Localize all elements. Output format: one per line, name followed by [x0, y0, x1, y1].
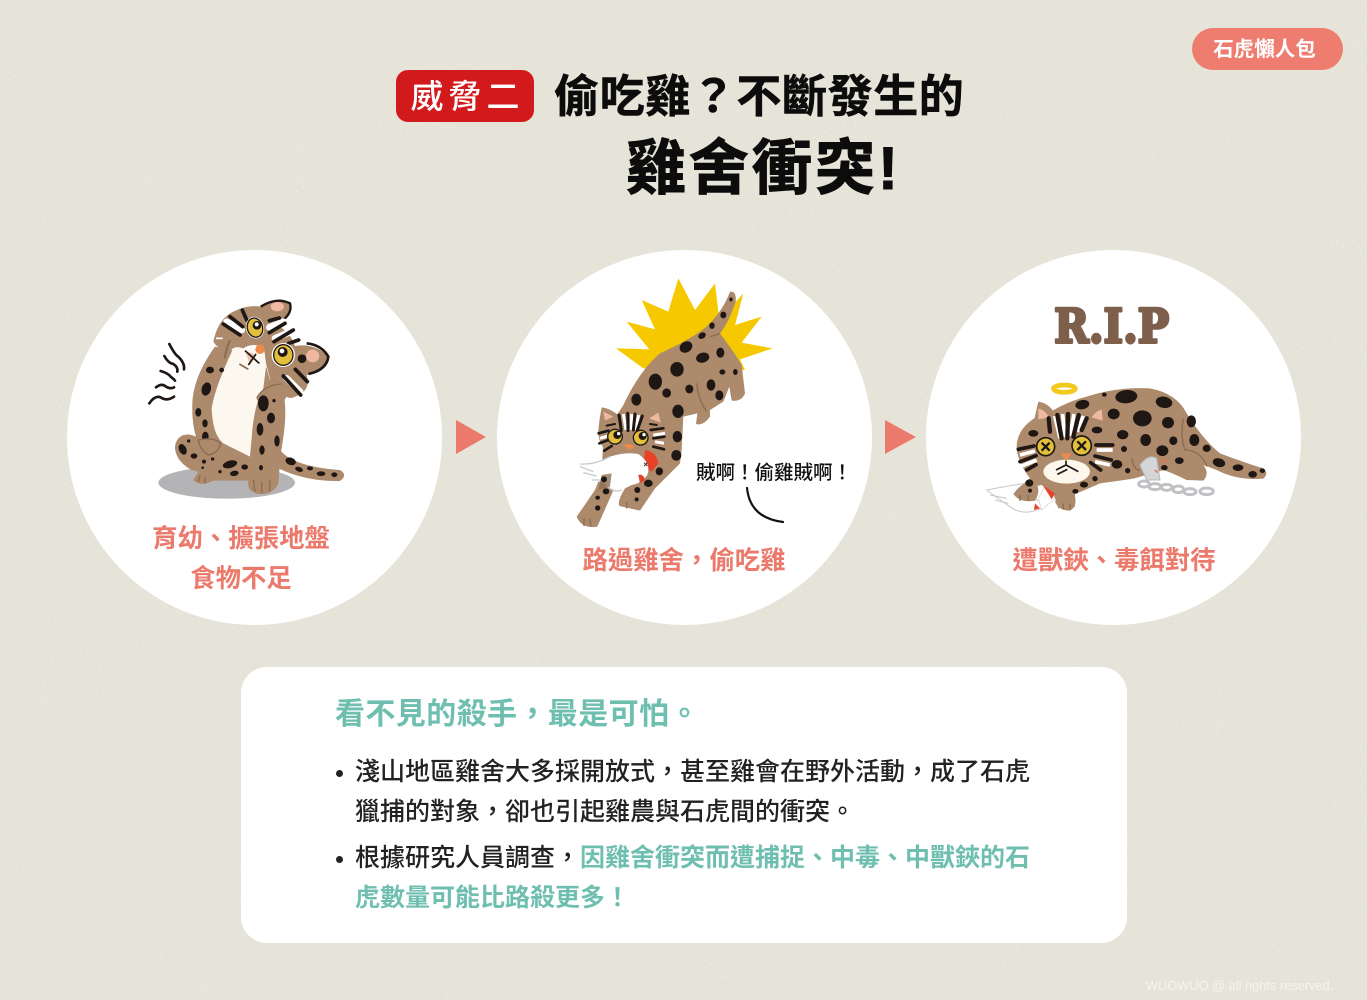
caption: circle one: 食物不足: [190, 565, 292, 593]
arrow: first to second: [456, 420, 486, 454]
illustration: R.I.P leopard cat: [986, 300, 1266, 513]
panel: circle three background: [926, 250, 1301, 625]
caption: circle three: 遭獸鋏、毒餌對待: [1012, 547, 1216, 575]
card heading: 看不見的殺手，最是可怕。: [335, 698, 700, 731]
caption: circle two: 路過雞舍，偷吃雞: [582, 547, 786, 575]
panel: circle one background: [67, 250, 442, 625]
caption: circle one: 育幼、擴張地盤: [152, 525, 330, 553]
bullet two: [336, 856, 343, 863]
panel: explanation card: [241, 667, 1127, 943]
paragraph two: 虎數量可能比路殺更多！: [355, 884, 630, 912]
title line two: 雞舍衝突!: [626, 135, 901, 202]
panel: circle two background: [497, 250, 872, 625]
paragraph one: 淺山地區雞舍大多採開放式，甚至雞會在野外活動，成了石虎: [355, 758, 1030, 786]
speech text: 賊啊！偷雞賊啊！: [696, 462, 852, 484]
paragraph one: 獵捕的對象，卻也引起雞農與石虎間的衝突。: [355, 798, 855, 826]
title badge: threat two: [396, 70, 534, 122]
paragraph two: 根據研究人員調查，因雞舍衝突而遭捕捉、中毒、中獸鋏的石: [355, 844, 1030, 872]
illustration: R.I.P leopard cat: R.I.P: [1054, 300, 1169, 355]
badge: series tag: [1192, 28, 1343, 70]
arrow: second to third: [885, 420, 916, 454]
badge: series tag: 石虎懶人包: [1213, 38, 1316, 61]
footer credit: WUOWUO @ all rights reserved.: [1146, 978, 1333, 993]
illustration: leopard cat scratching: [148, 300, 344, 499]
title badge: threat two: 威脅二: [410, 78, 524, 115]
bullet one: [336, 770, 343, 777]
illustration: leopard cat fleeing with chicken: [576, 278, 772, 528]
paragraph two: [355, 844, 1030, 912]
title line one: 偷吃雞？不斷發生的: [554, 71, 964, 122]
caption: circle one: [152, 524, 330, 593]
speech line: [746, 486, 784, 524]
paragraph one: [355, 758, 1030, 826]
